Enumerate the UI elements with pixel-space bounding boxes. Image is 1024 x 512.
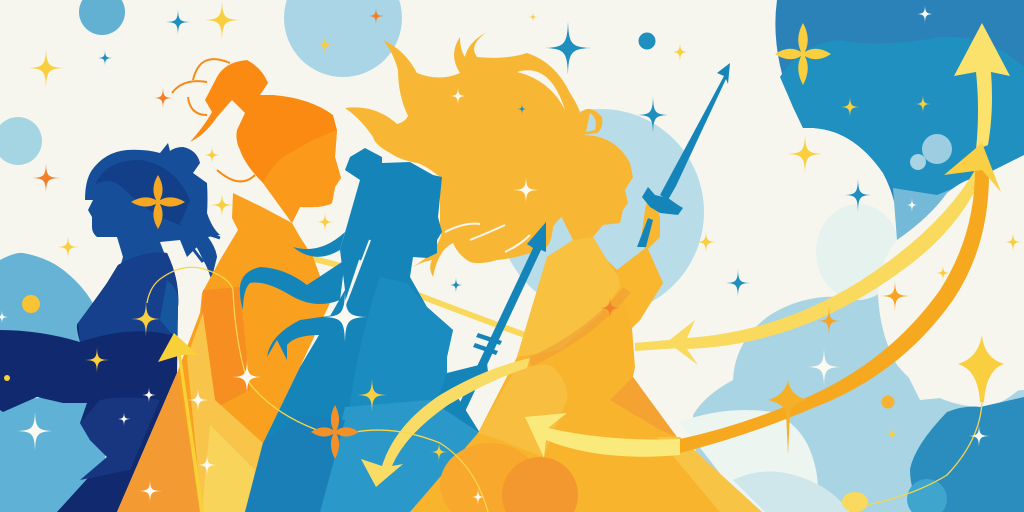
sparkles: blue bbox=[97, 9, 871, 297]
right clouds bbox=[680, 0, 1024, 512]
sparkle: long-tail yellow bbox=[958, 335, 1004, 402]
arrow: pale yellow to top right bbox=[635, 165, 984, 365]
figure: navy heroine bbox=[0, 143, 220, 512]
arrow: orange sweep bbox=[680, 170, 989, 453]
icon: orange flower star bbox=[131, 175, 185, 229]
arrow: pale yellow sweeping left bbox=[525, 413, 680, 458]
icon: yellow four-petal star bbox=[775, 23, 831, 85]
arrow: pale yellow sweeping down-left bbox=[361, 358, 530, 487]
arrow: up, top right bbox=[954, 23, 1010, 150]
arrow: yellow head bbox=[944, 143, 1001, 192]
sparkle: amber tall bbox=[768, 380, 807, 455]
figure: yellow heroine hair bbox=[345, 32, 602, 277]
arrow: band through yellow figure bbox=[530, 290, 627, 362]
background circles and left blobs bbox=[0, 0, 704, 512]
hair gaps bbox=[445, 70, 596, 252]
thin yellow ribbon behind figures bbox=[310, 258, 525, 335]
figure: orange heroine bbox=[117, 59, 341, 512]
arrow: small yellow on navy figure bbox=[158, 333, 204, 512]
yellow node bbox=[842, 492, 868, 512]
figure: yellow heroine bbox=[410, 135, 762, 512]
spear bbox=[455, 222, 546, 416]
sparkles: amber bbox=[817, 281, 910, 335]
sword bbox=[637, 63, 730, 247]
sparkles: orange bbox=[32, 7, 621, 319]
amber dot bbox=[882, 396, 894, 408]
icon: orange flower star on blue figure bbox=[311, 405, 359, 459]
figure: blue heroine bbox=[240, 148, 488, 512]
thin constellation lines bbox=[147, 267, 982, 512]
